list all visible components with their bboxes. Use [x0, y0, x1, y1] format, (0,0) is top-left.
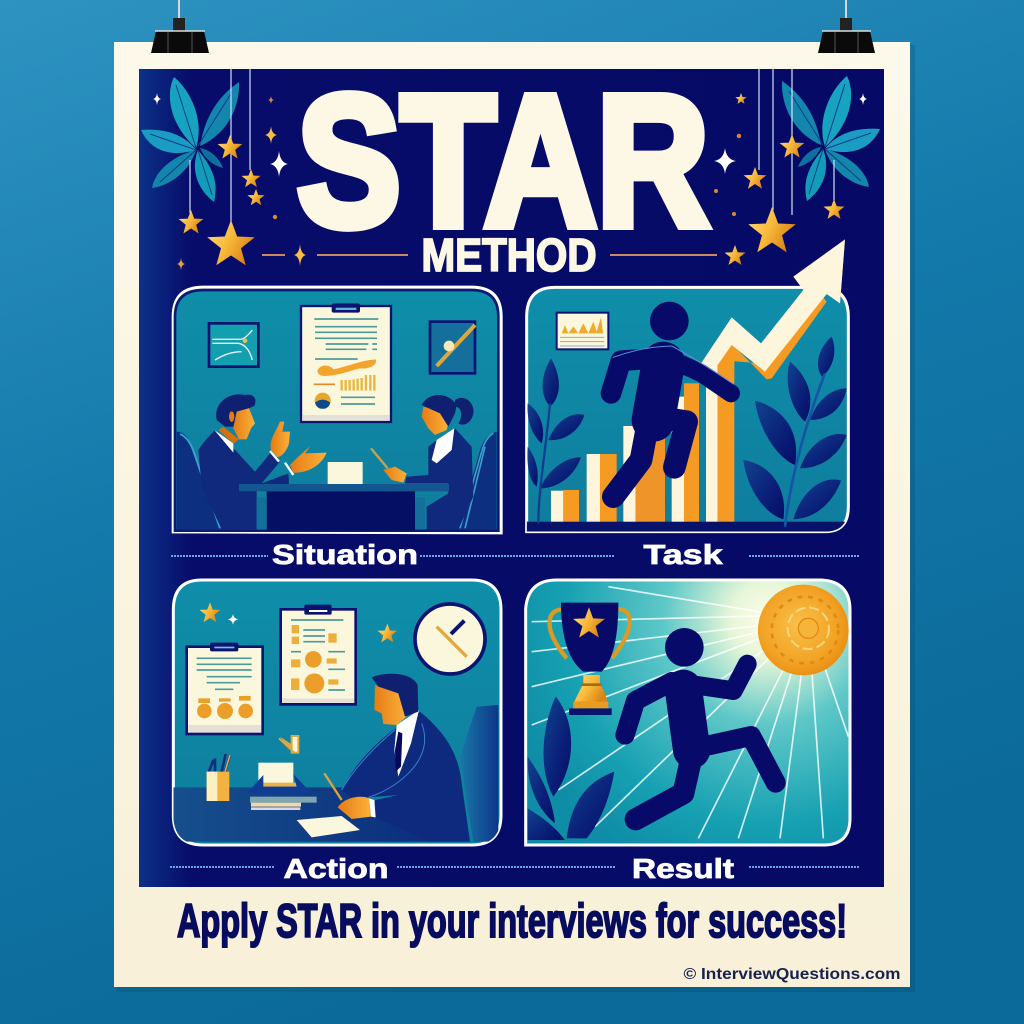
- panel: situation: [173, 287, 501, 533]
- icon: left binder clip: [151, 0, 209, 53]
- hanging star strings: [190, 69, 834, 225]
- poster sheet: [114, 42, 915, 992]
- framed picture left: [209, 323, 258, 367]
- bar chart: [551, 345, 734, 522]
- decorative stars: [153, 93, 867, 270]
- small chart card: [557, 313, 608, 349]
- clipboard right: [281, 605, 356, 704]
- right plant: [743, 337, 847, 527]
- label: Task: Task: [644, 539, 723, 570]
- paper on desk: [297, 816, 360, 837]
- wall stars: [200, 602, 397, 642]
- label: Result: Result: [632, 853, 734, 884]
- panel: task: [527, 239, 850, 533]
- title: STAR: STAR: [297, 58, 709, 265]
- gold medal: [758, 585, 849, 675]
- left plant: [527, 358, 584, 523]
- panel: result: [526, 580, 850, 845]
- framed picture right: [430, 322, 475, 373]
- man speaking: [177, 394, 327, 529]
- copyright: © InterviewQuestions.com: [684, 966, 900, 983]
- paper on table: [328, 462, 363, 484]
- label: Action: Action: [284, 853, 388, 884]
- running figure: [625, 628, 776, 819]
- stack of books: [247, 736, 317, 810]
- man writing: [324, 674, 470, 842]
- running figure: [611, 302, 733, 497]
- dotted rules beside labels: [170, 556, 860, 867]
- icon: right leaf cluster: [782, 76, 880, 201]
- icon: left leaf cluster: [141, 77, 239, 202]
- sun rays: [532, 587, 848, 838]
- clipboard left: [187, 643, 263, 734]
- clipboard report: [301, 303, 391, 422]
- office chair: [460, 705, 498, 842]
- subtitle: METHOD: METHOD: [422, 229, 596, 281]
- bottom floor band: [526, 522, 846, 532]
- table: [239, 484, 449, 531]
- woman listening: [371, 395, 497, 529]
- subtitle rules: [262, 254, 717, 256]
- rising arrow: [700, 239, 845, 379]
- navy panel: [139, 69, 884, 887]
- plant: [528, 697, 614, 840]
- trophy: [549, 603, 630, 715]
- label: Situation: Situation: [272, 539, 418, 570]
- wall clock: [415, 604, 485, 674]
- pen cup: [207, 754, 230, 801]
- panel: action: [173, 580, 501, 845]
- desk: [173, 787, 435, 842]
- icon: right binder clip: [818, 0, 875, 53]
